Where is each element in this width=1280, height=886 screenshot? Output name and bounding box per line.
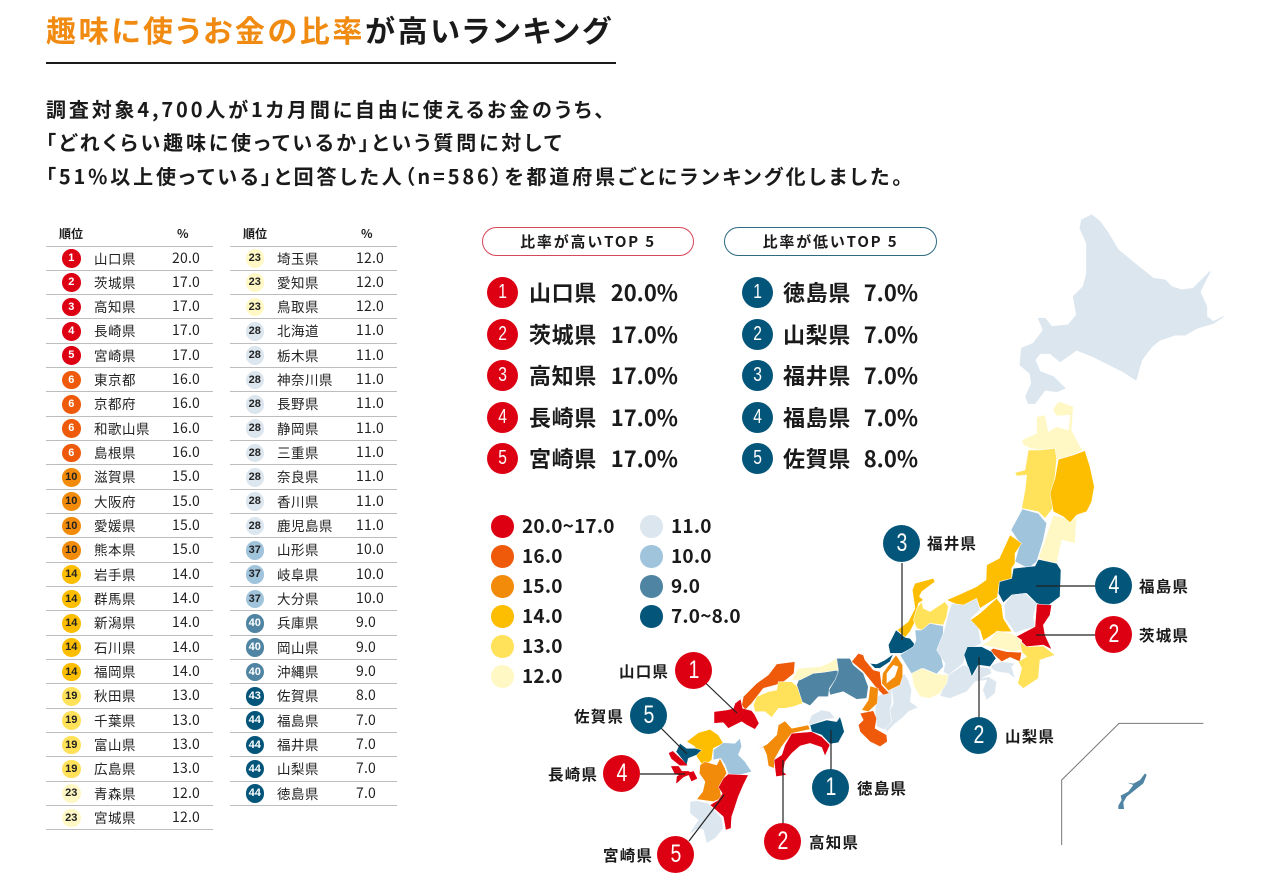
title: 趣味に使うお金の比率が高いランキング	[46, 7, 613, 51]
ranking table: right column: %	[361, 225, 373, 242]
ranking table: right column: 7.0	[356, 710, 376, 730]
list: low ratio top 5: 福井県	[783, 359, 851, 391]
list: high ratio top 5: 宮崎県	[529, 442, 597, 474]
ranking table: right column: 44	[249, 787, 261, 799]
ranking table: right column: 12.0	[356, 296, 384, 316]
ranking table: left column: 13.0	[172, 734, 200, 754]
pill: low ratio top 5: 比率が低いTOP 5	[763, 231, 898, 252]
ranking table: left column: 秋田県	[94, 685, 136, 705]
map callout: Fukushima: 福島県	[1139, 575, 1189, 597]
ranking table: left column: 6	[68, 447, 74, 459]
ranking table: right column: 12.0	[356, 272, 384, 292]
ranking table: left column: 順位	[59, 225, 83, 242]
ranking table: right column: 44	[249, 763, 261, 775]
ranking table: left column: 大阪府	[94, 491, 136, 511]
ranking table: left column: 千葉県	[94, 710, 136, 730]
list: high ratio top 5: 5	[498, 447, 507, 469]
ranking table: left column: 4	[68, 325, 74, 337]
ranking table: left column: 6	[68, 374, 74, 386]
ranking table: right column: 44	[249, 714, 261, 726]
ranking table: left column: 新潟県	[94, 612, 136, 632]
map callout: Nagasaki	[548, 755, 640, 792]
ranking table: right column: 7.0	[356, 783, 376, 803]
ranking table: right column: 鹿児島県	[277, 515, 333, 535]
map callout: Saga: 佐賀県	[574, 705, 624, 727]
ranking table: right column: 順位	[243, 225, 267, 242]
list: high ratio top 5: 17.0%	[611, 400, 678, 432]
map: Chugoku and Shikoku	[714, 654, 893, 777]
ranking table: right column: 鳥取県	[277, 296, 319, 316]
map: Kinki	[852, 653, 918, 747]
ranking table: left column: 宮崎県	[94, 345, 136, 365]
list: low ratio top 5: 山梨県	[783, 318, 851, 350]
ranking table: right column: 埼玉県	[277, 248, 319, 268]
ranking table: right column: 43	[249, 690, 261, 702]
map callout: Fukushima	[1095, 567, 1189, 604]
ranking table: left column: 13.0	[172, 758, 200, 778]
ranking table: right column: 40	[249, 641, 261, 653]
ranking table: left column: 23	[65, 787, 77, 799]
ranking table: left column: 愛媛県	[94, 515, 136, 535]
ranking table: right column: 山梨県	[277, 758, 319, 778]
map callout: Nagasaki: 4	[616, 759, 627, 787]
ranking table: right column: 37	[249, 544, 261, 556]
ranking table: right column: 神奈川県	[277, 369, 333, 389]
ranking table: left column: 15.0	[172, 539, 200, 559]
map callout: Miyazaki: 5	[670, 840, 681, 868]
map: Kyushu	[669, 729, 752, 843]
map callout: Saga	[574, 697, 667, 734]
pill: high ratio top 5: 比率が高いTOP 5	[520, 231, 656, 252]
map: Kanto and Chubu	[888, 535, 1061, 700]
ranking table: right column: 福島県	[277, 710, 319, 730]
list: high ratio top 5: 17.0%	[611, 318, 678, 350]
ranking table: right column: 栃木県	[277, 345, 319, 365]
ranking table: left column: 14	[65, 593, 77, 605]
ranking table: left column: 高知県	[94, 296, 136, 316]
list: high ratio top 5: 茨城県	[529, 318, 597, 350]
ranking table: right column: 8.0	[356, 685, 376, 705]
ranking table: left column: 23	[65, 812, 77, 824]
map callout: Kochi	[764, 823, 859, 860]
ranking table: right column: 28	[249, 520, 261, 532]
list: low ratio top 5: 5	[753, 447, 762, 469]
ranking table: left column: 19	[65, 714, 77, 726]
ranking table: left column: 1	[68, 252, 74, 264]
ranking table: right column: 沖縄県	[277, 661, 319, 681]
ranking table: left column: 19	[65, 739, 77, 751]
list: low ratio top 5: 7.0%	[864, 400, 918, 432]
ranking table: right column: 11.0	[356, 491, 384, 511]
ranking table: left column: 岩手県	[94, 564, 136, 584]
legend: 13.0	[522, 632, 563, 659]
ranking table: left column: 12.0	[172, 807, 200, 827]
ranking table: left column: 17.0	[172, 296, 200, 316]
ranking table: right column: 10.0	[356, 588, 384, 608]
map callout: Yamaguchi: 山口県	[619, 660, 669, 682]
legend: 15.0	[522, 572, 563, 599]
list: high ratio top 5: 高知県	[529, 359, 597, 391]
ranking table: left column: 和歌山県	[94, 418, 150, 438]
ranking table: left column: 14.0	[172, 588, 200, 608]
ranking table: left column: 14	[65, 617, 77, 629]
ranking table: left column: 19	[65, 690, 77, 702]
ranking table: left column: 宮城県	[94, 807, 136, 827]
ranking table: left column: 熊本県	[94, 539, 136, 559]
lead text	[46, 94, 905, 190]
ranking table: left column: 島根県	[94, 442, 136, 462]
ranking table: left column: 13.0	[172, 685, 200, 705]
ranking table: left column: 5	[68, 349, 74, 361]
ranking table: left column: 14.0	[172, 564, 200, 584]
ranking table: right column: 28	[249, 374, 261, 386]
ranking table: left column: 京都府	[94, 393, 136, 413]
ranking table: left column: 13.0	[172, 710, 200, 730]
ranking table: right column: 11.0	[356, 369, 384, 389]
map callout: Tokushima: 1	[825, 773, 836, 801]
ranking table: left column: 17.0	[172, 345, 200, 365]
map callout: Tokushima: 徳島県	[857, 777, 907, 799]
ranking table: right column: 佐賀県	[277, 685, 319, 705]
ranking table: left column: 長崎県	[94, 320, 136, 340]
ranking table: right column: 10.0	[356, 564, 384, 584]
ranking table: right column: 11.0	[356, 466, 384, 486]
ranking table: right column: 28	[249, 495, 261, 507]
title rule	[46, 62, 616, 64]
list: high ratio top 5: 4	[498, 406, 507, 428]
ranking table: left column: 10	[65, 544, 77, 556]
ranking table: left column: 14	[65, 666, 77, 678]
list: low ratio top 5: 2	[753, 322, 762, 344]
ranking table: right column: 40	[249, 666, 261, 678]
ranking table: left column: 東京都	[94, 369, 136, 389]
ranking table: left column	[46, 225, 213, 830]
ranking table: left column: 14	[65, 568, 77, 580]
legend: 20.0~17.0	[522, 512, 615, 539]
legend: 14.0	[522, 602, 563, 629]
ranking table: right column: 28	[249, 471, 261, 483]
legend	[491, 512, 741, 689]
ranking table: left column: 15.0	[172, 466, 200, 486]
ranking table: left column: 10	[65, 520, 77, 532]
ranking table: right column: 山形県	[277, 539, 319, 559]
list: high ratio top 5: 山口県	[529, 276, 597, 308]
ranking table: right column: 11.0	[356, 320, 384, 340]
map callout: Ibaraki	[1095, 616, 1189, 653]
ranking table: left column: 14.0	[172, 637, 200, 657]
ranking table: right column: 28	[249, 349, 261, 361]
ranking table: right column: 23	[249, 276, 261, 288]
ranking table: right column: 香川県	[277, 491, 319, 511]
ranking table: left column: 10	[65, 471, 77, 483]
list: low ratio top 5: 4	[753, 406, 762, 428]
ranking table: left column: 10	[65, 495, 77, 507]
ranking table: right column: 福井県	[277, 734, 319, 754]
list: high ratio top 5: 1	[498, 281, 507, 303]
ranking table: left column: 6	[68, 398, 74, 410]
map callout: Yamanashi	[960, 717, 1055, 754]
map: Okinawa inset	[1062, 723, 1203, 845]
ranking table: right column: 岡山県	[277, 637, 319, 657]
ranking table: left column: 20.0	[172, 248, 200, 268]
ranking table: right column: 11.0	[356, 515, 384, 535]
ranking table: left column: 茨城県	[94, 272, 136, 292]
ranking table: right column: 愛知県	[277, 272, 319, 292]
ranking table: left column: 青森県	[94, 783, 136, 803]
ranking table: right column: 大分県	[277, 588, 319, 608]
ranking table: right column: 7.0	[356, 734, 376, 754]
ranking table: right column: 28	[249, 447, 261, 459]
list: high ratio top 5: 17.0%	[611, 359, 678, 391]
ranking table: left column: 16.0	[172, 442, 200, 462]
legend: 10.0	[671, 542, 712, 569]
list: low ratio top 5: 7.0%	[864, 359, 918, 391]
ranking table: left column: 群馬県	[94, 588, 136, 608]
list: high ratio top 5	[487, 276, 678, 474]
ranking table: right column: 11.0	[356, 345, 384, 365]
ranking table: left column: 滋賀県	[94, 466, 136, 486]
ranking table: right column: 28	[249, 422, 261, 434]
list: high ratio top 5: 3	[498, 364, 507, 386]
ranking table: right column: 12.0	[356, 248, 384, 268]
ranking table: left column: 16.0	[172, 369, 200, 389]
map callout: Ibaraki: 茨城県	[1139, 624, 1189, 646]
ranking table: left column: 14.0	[172, 612, 200, 632]
ranking table: right column: 10.0	[356, 539, 384, 559]
ranking table: left column: 3	[68, 301, 74, 313]
list: low ratio top 5: 徳島県	[783, 276, 851, 308]
ranking table: left column: 2	[68, 276, 74, 288]
ranking table: left column: 14	[65, 641, 77, 653]
ranking table: right column: 9.0	[356, 661, 376, 681]
pill: low ratio top 5	[724, 227, 937, 256]
list: high ratio top 5: 長崎県	[529, 400, 597, 432]
ranking table: left column: 福岡県	[94, 661, 136, 681]
list: low ratio top 5	[742, 276, 918, 474]
leader lines	[640, 563, 1096, 841]
list: high ratio top 5: 17.0%	[611, 442, 678, 474]
lead text: 調査対象4,700人が1カ月間に自由に使えるお金のうち、	[46, 94, 607, 123]
legend: 12.0	[522, 662, 563, 689]
ranking table: right column: 兵庫県	[277, 612, 319, 632]
map callout: Fukui: 福井県	[927, 532, 977, 554]
map callout: Ibaraki: 2	[1108, 620, 1119, 648]
ranking table: right column: 9.0	[356, 637, 376, 657]
list: low ratio top 5: 1	[753, 281, 762, 303]
map callout: Nagasaki: 長崎県	[548, 763, 598, 785]
ranking table: right column	[230, 225, 397, 806]
list: high ratio top 5: 2	[498, 322, 507, 344]
ranking table: left column: 15.0	[172, 515, 200, 535]
list: low ratio top 5: 7.0%	[864, 318, 918, 350]
map callout: Kochi: 2	[777, 827, 788, 855]
ranking table: right column: 北海道	[277, 320, 319, 340]
ranking table: left column: 15.0	[172, 491, 200, 511]
map callout: Yamaguchi	[619, 652, 712, 689]
ranking table: left column: 山口県	[94, 248, 136, 268]
ranking table: right column: 23	[249, 301, 261, 313]
ranking table: right column: 37	[249, 568, 261, 580]
list: low ratio top 5: 福島県	[783, 400, 851, 432]
legend: 7.0~8.0	[671, 602, 741, 629]
ranking table: right column: 28	[249, 398, 261, 410]
ranking table: left column: 19	[65, 763, 77, 775]
map callout: Fukushima: 4	[1108, 571, 1119, 599]
ranking table: left column: 6	[68, 422, 74, 434]
ranking table: left column: 石川県	[94, 637, 136, 657]
list: low ratio top 5: 佐賀県	[783, 442, 851, 474]
map callout: Miyazaki	[603, 836, 694, 873]
ranking table: left column: %	[177, 225, 189, 242]
list: high ratio top 5: 20.0%	[611, 276, 678, 308]
ranking table: right column: 岐阜県	[277, 564, 319, 584]
ranking table: right column: 7.0	[356, 758, 376, 778]
ranking table: right column: 11.0	[356, 442, 384, 462]
ranking table: left column: 17.0	[172, 272, 200, 292]
ranking table: left column: 14.0	[172, 661, 200, 681]
map callout: Kochi: 高知県	[809, 831, 859, 853]
map callout: Fukui	[883, 525, 977, 562]
map callout: Fukui: 3	[896, 529, 907, 557]
ranking table: right column: 徳島県	[277, 783, 319, 803]
ranking table: right column: 9.0	[356, 612, 376, 632]
pill: high ratio top 5	[482, 227, 694, 256]
lead text: 「どれくらい趣味に使っているか」という質問に対して	[46, 127, 564, 156]
ranking table: right column: 11.0	[356, 418, 384, 438]
ranking table: left column: 12.0	[172, 783, 200, 803]
map callout: Miyazaki: 宮崎県	[603, 844, 653, 866]
map callout: Yamaguchi: 1	[688, 656, 699, 684]
map callout: Yamanashi: 山梨県	[1005, 725, 1055, 747]
map callout: Tokushima	[812, 769, 907, 806]
ranking table: right column: 奈良県	[277, 466, 319, 486]
ranking table: right column: 静岡県	[277, 418, 319, 438]
ranking table: right column: 44	[249, 739, 261, 751]
ranking table: right column: 37	[249, 593, 261, 605]
list: low ratio top 5: 3	[753, 364, 762, 386]
ranking table: right column: 28	[249, 325, 261, 337]
ranking table: right column: 11.0	[356, 393, 384, 413]
ranking table: right column: 長野県	[277, 393, 319, 413]
ranking table: left column: 広島県	[94, 758, 136, 778]
ranking table: right column: 三重県	[277, 442, 319, 462]
ranking table: left column: 16.0	[172, 393, 200, 413]
map callout: Saga: 5	[643, 701, 654, 729]
ranking table: right column: 23	[249, 252, 261, 264]
ranking table: left column: 富山県	[94, 734, 136, 754]
legend: 11.0	[671, 512, 712, 539]
list: low ratio top 5: 7.0%	[864, 276, 918, 308]
ranking table: right column: 40	[249, 617, 261, 629]
map callout: Yamanashi: 2	[973, 721, 984, 749]
legend: 16.0	[522, 542, 563, 569]
map: Hokkaido and Tohoku	[1011, 215, 1223, 568]
list: low ratio top 5: 8.0%	[864, 442, 918, 474]
lead text: 「51%以上使っている」と回答した人（n=586）を都道府県ごとにランキング化しました。	[46, 161, 905, 190]
ranking table: left column: 16.0	[172, 418, 200, 438]
legend: 9.0	[671, 572, 700, 599]
ranking table: left column: 17.0	[172, 320, 200, 340]
